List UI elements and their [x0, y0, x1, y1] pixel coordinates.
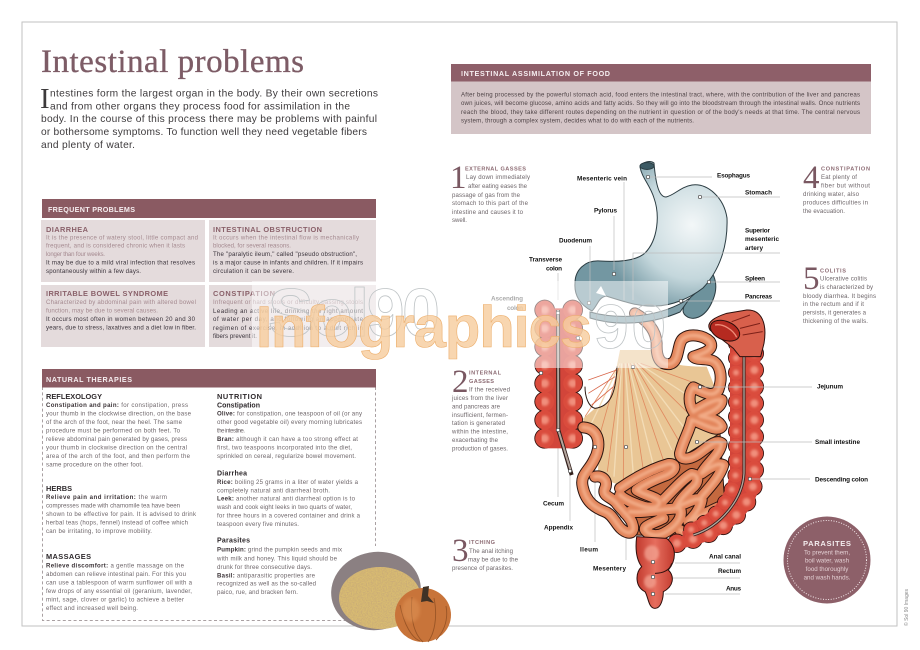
text: massages: MASSAGES	[46, 552, 91, 561]
callout 4: constipation: Eat plenty of	[821, 174, 857, 181]
heading: natural therapies	[42, 369, 376, 388]
text: reflexology: of the arch of the foot, near the heel. The same	[46, 419, 183, 426]
callout 5: colitis: 5	[803, 261, 820, 297]
callout 4: constipation	[803, 160, 870, 215]
text: herbs: HERBS	[46, 484, 72, 493]
text: massages	[46, 552, 193, 612]
cell: diarrhea: longer than four weeks.	[46, 251, 105, 258]
callout: parasites badge: and wash hands.	[804, 574, 851, 582]
cell: constipation: Infrequent or hard stools or difficulty passing stools.	[213, 299, 365, 306]
illustration: stomach, spleen and pancreas	[575, 162, 727, 323]
cell: intestinal obstruction: INTESTINAL OBSTRUCTION	[213, 225, 322, 234]
text: herbs: compresses made with chamomile tea have been	[46, 502, 180, 510]
cell: intestinal obstruction: It occurs when the intestinal flow is mechanically	[213, 234, 360, 242]
anatomy labels: Anus	[726, 586, 741, 592]
callout 2: internal gasses: If the received	[469, 386, 510, 394]
text: herbs: shown to be effective for pain. It is advised to drink	[46, 511, 197, 518]
callout 5: colitis: COLITIS	[820, 268, 846, 274]
callout 1: external gasses: 1	[450, 160, 466, 196]
cell: intestinal obstruction	[209, 220, 376, 282]
anatomy labels: Ileum	[580, 546, 598, 554]
leader lines: lower anatomy	[558, 430, 740, 594]
cell: constipation: of water per day, and following an appropriate	[213, 316, 364, 323]
heading: natural therapies: NATURAL THERAPIES	[46, 375, 132, 384]
text: reflexology: same procedure on the other foot.	[46, 462, 143, 468]
anatomy labels: Small intestine	[815, 439, 860, 446]
anatomy labels: artery	[745, 245, 763, 252]
text: reflexology	[46, 392, 192, 468]
callout 4: constipation: drinking water, also	[803, 191, 860, 198]
ascending colon	[545, 308, 573, 448]
anatomy labels: Pylorus	[594, 208, 617, 214]
text: nutrition: other good vegetable oil) every morning lubricates	[217, 419, 362, 426]
cell: constipation: regimen of exercise, in addition to a diet rich in	[213, 325, 363, 332]
anatomy labels: Anal canal	[709, 554, 741, 560]
anatomy labels: colon	[507, 305, 523, 312]
cell: diarrhea: frequent, and is considered chronic when it lasts	[46, 242, 185, 250]
cell: diarrhea	[41, 220, 205, 282]
cell: irritable bowel syndrome: It occurs most often in women between 20 and 30	[46, 316, 196, 323]
watermark band	[252, 281, 668, 368]
panel: frequent problems	[41, 199, 376, 347]
callout 2: internal gasses: juices from the liver	[451, 395, 508, 402]
watermark: Infographics	[256, 295, 592, 360]
text: reflexology: area of the arch of the foot, and then perform the	[46, 453, 191, 460]
cell: constipation: Leading an active life, drinking the right amount	[213, 308, 363, 315]
callout 4: constipation: CONSTIPATION	[821, 166, 870, 172]
callout 5: colitis: Ulcerative colitis	[820, 276, 867, 282]
callout 1: external gasses: Lay down immediately	[466, 174, 531, 181]
cell: irritable bowel syndrome: Characterized by abdominal pain with altered bowel	[46, 299, 196, 306]
callout 5: colitis	[803, 261, 876, 325]
intro text block: body. In the course of this process there may be problems with painful	[41, 114, 377, 125]
callout 5: colitis: in the rectum and if it	[803, 301, 864, 308]
callout 2: internal gasses: within the intestine,	[451, 428, 508, 436]
text: nutrition: teaspoon every five minutes.	[217, 521, 299, 528]
text: nutrition	[216, 392, 363, 596]
text: reflexology: Constipation and pain: for constipation, press	[46, 402, 188, 409]
callout: parasites badge: boil water, wash	[805, 558, 850, 564]
cell: diarrhea: It is the presence of watery stool, little compact and	[46, 234, 198, 242]
callout 2: internal gasses: and pancreas are	[452, 404, 501, 410]
leader lines: upper anatomy	[558, 177, 812, 479]
callout 1: external gasses: EXTERNAL GASSES	[465, 166, 526, 172]
heading: frequent problems: FREQUENT PROBLEMS	[48, 205, 135, 214]
text: reflexology: your thumb in clockwise direction on the central	[46, 444, 187, 452]
pylorus opening	[596, 286, 606, 296]
callout 4: constipation: the evacuation.	[803, 208, 845, 215]
panel: natural therapies	[42, 369, 376, 620]
appendix and colon band	[558, 310, 572, 475]
callout 2: internal gasses: INTERNAL	[469, 370, 502, 376]
callout 2: internal gasses: 2	[452, 364, 468, 400]
descending colon	[677, 320, 754, 543]
cell: intestinal obstruction: blocked, for several reasons.	[213, 242, 291, 250]
callout 2: internal gasses	[451, 364, 510, 452]
anatomy labels	[491, 172, 868, 592]
text: nutrition: Leek: another natural anti diarrheal option is to	[217, 496, 356, 502]
cell: intestinal obstruction: is a major cause in infants and children. If it impairs	[213, 260, 363, 266]
illustration: bowl of grain and pumpkin	[325, 545, 451, 642]
callout: parasites badge: PARASITES	[803, 539, 851, 548]
cell: irritable bowel syndrome: function, may be due to several causes.	[46, 308, 158, 314]
text: assimilation body: reach the blood, they take different routes depending on the nutrient in question or of the body's needs at that time. The central nervous	[461, 109, 860, 116]
text: nutrition: Rice: boiling 25 grams in a liter of water yields a	[217, 479, 359, 486]
callout 3: itching: may be due to the	[468, 556, 519, 564]
callout 5: colitis: thickening of the walls.	[803, 318, 868, 325]
heading: assimilation: INTESTINAL ASSIMILATION OF FOOD	[461, 69, 610, 78]
callout 3: itching	[452, 533, 519, 572]
rectum and anus	[636, 537, 674, 608]
callout 3: itching: The anal itching	[469, 548, 513, 555]
text: herbs: herbal teas (hops, fennel) instead of coffee which	[46, 520, 188, 526]
anatomy labels: Superior	[745, 228, 770, 234]
anatomy labels: Appendix	[544, 524, 573, 532]
anatomy labels: mesenteric	[745, 236, 779, 243]
anatomy labels: Esophagus	[717, 172, 750, 180]
text: massages: mint, sage, clover or garlic) to achieve a better	[46, 596, 184, 604]
pancreas	[590, 298, 690, 323]
text: reflexology: procedure must be performed on both feet. To	[46, 428, 181, 434]
intro text block: or bothersome symptoms. To function well they need vegetable fibers	[41, 127, 367, 138]
text: nutrition: Olive: for constipation, one teaspoon of oil (or any	[217, 410, 363, 418]
cell: diarrhea: It may be due to a mild viral infection that resolves	[46, 260, 195, 266]
intro text block: ntestines form the largest organ in the body. By their own secretions	[50, 88, 378, 100]
text: nutrition: NUTRITION	[217, 392, 262, 401]
callout 2: internal gasses: exacerbating the	[452, 437, 499, 444]
callout 2: internal gasses: GASSES	[469, 379, 494, 385]
anatomy labels: colon	[546, 266, 562, 272]
callout 1: external gasses: intestine and causes it to	[452, 209, 524, 216]
callout 5: colitis: persists, it generates a	[803, 310, 867, 316]
text: herbs	[46, 484, 197, 535]
callout 3: itching: 3	[452, 533, 468, 569]
anatomy labels: Mesenteric vein	[577, 176, 627, 182]
spleen	[683, 262, 716, 318]
anatomy labels: Stomach	[745, 190, 772, 196]
text: assimilation body: own juices, will become glucose, amino acids and fatty acids. So they will go into the bloodstream through the intestinal walls. Once nutrients	[461, 100, 860, 107]
anatomy labels: Ascending	[491, 296, 523, 302]
text: assimilation body	[461, 92, 860, 124]
text: nutrition: paico, rue, and bracken fern.	[217, 589, 298, 596]
anatomy labels: Mesentery	[593, 566, 626, 572]
callout 2: internal gasses: tation is generated	[452, 420, 505, 427]
cell: constipation: CONSTIPATION	[213, 289, 275, 298]
anatomy labels: Descending colon	[815, 476, 868, 484]
intro text block: I	[40, 83, 50, 115]
text: nutrition: first, two teaspoons incorporated into the diet,	[217, 444, 352, 452]
esophagus opening	[640, 162, 654, 170]
heading: assimilation	[451, 64, 871, 82]
stomach	[575, 162, 727, 311]
text: nutrition: for three hours in a covered container and drink a	[217, 512, 361, 520]
text: nutrition: Bran: although it can have a too strong effect at	[217, 436, 358, 443]
watermark: 90	[594, 293, 666, 362]
text: nutrition: completely natural anti diarrheal broth.	[217, 488, 330, 494]
callout 1: external gasses: after eating eases the	[468, 183, 528, 190]
callout 3: itching: ITCHING	[469, 540, 495, 546]
cell: constipation	[209, 285, 376, 347]
callout 1: external gasses: passage of gas from the	[452, 192, 521, 199]
label dots	[539, 175, 752, 596]
intro text block: and plenty of water.	[41, 140, 135, 151]
text: assimilation body: After being processed by the powerful stomach acid, food enters the intestinal tract, where, with the contribution of the liver and pancreas	[461, 92, 860, 98]
text: herbs: can be irritating, to improve mobility.	[46, 528, 152, 535]
mesentery	[583, 350, 720, 487]
callout 4: constipation: fiber but without	[821, 182, 870, 190]
text: massages: few drops of any essential oil (geranium, lavender,	[46, 588, 192, 595]
anatomy labels: Spleen	[745, 276, 765, 282]
cell: constipation: fibers prevent it.	[213, 333, 257, 340]
text: nutrition: drunk for three consecutive days.	[217, 564, 312, 571]
callout 1: external gasses	[450, 160, 531, 224]
text: nutrition: the intestine.	[217, 428, 245, 434]
callout 5: colitis: is characterized by	[820, 284, 874, 291]
text: nutrition: recognized as well as the so-called	[217, 580, 316, 588]
cell: diarrhea: spontaneously within a few days.	[46, 268, 141, 275]
anatomy labels: Jejunum	[817, 384, 843, 390]
callout 5: colitis: bloody diarrhea. It begins	[803, 293, 876, 300]
anatomy labels: Transverse	[529, 256, 562, 264]
callout 4: constipation: produces difficulties in	[803, 200, 868, 206]
cell: irritable bowel syndrome: years, due to stress, laxatives and a diet low in fiber.	[46, 324, 196, 332]
text: nutrition: sprinkled on cereal, regularize bowel movement.	[217, 453, 356, 460]
heading: frequent problems	[42, 199, 376, 218]
callout: parasites badge: To prevent them,	[804, 550, 850, 556]
anatomy labels: Cecum	[543, 500, 564, 508]
colon cut end	[707, 310, 765, 357]
callout 1: external gasses: stomach to this part of the	[452, 200, 529, 207]
anatomy labels: Duodenum	[559, 238, 592, 244]
intro text block: and from other organs they process food for assimilation in the	[50, 102, 350, 112]
text: nutrition: Pumpkin: grind the pumpkin seeds and mix	[217, 546, 342, 554]
text: massages: abdomen can relieve intestinal pain. For this you	[46, 571, 186, 578]
cell: irritable bowel syndrome: IRRITABLE BOWEL SYNDROME	[46, 289, 168, 298]
text: massages: effect and increased well being.	[46, 605, 138, 612]
callout 1: external gasses: swell.	[452, 217, 467, 224]
text: nutrition: Constipation	[217, 402, 260, 410]
anatomy labels: Pancreas	[745, 294, 772, 300]
callout 2: internal gasses: insufficient, fermen-	[452, 412, 508, 419]
text: herbs: Relieve pain and irritation: the warm	[46, 494, 167, 501]
callout: parasites badge	[784, 516, 870, 604]
text: nutrition: Parasites	[217, 538, 250, 544]
text: reflexology: relieve abdominal pain generated by gases, press	[46, 436, 187, 443]
cell: intestinal obstruction: The "paralytic ileum," called "pseudo obstruction",	[213, 251, 357, 258]
anatomy labels: Rectum	[718, 568, 741, 575]
cell: irritable bowel syndrome	[41, 285, 205, 347]
text: nutrition: with milk and honey. This liquid should be	[216, 556, 338, 562]
text: reflexology: your thumb in the clockwise direction, on the base	[46, 410, 192, 418]
intro text block	[40, 83, 378, 151]
text: massages: Relieve discomfort: a gentle massage on the	[46, 562, 185, 570]
dashed panel border	[42, 387, 376, 620]
watermark: Sol90	[268, 275, 440, 351]
small intestine	[582, 313, 725, 537]
illustration: large and small intestine	[545, 308, 765, 608]
credit: © Sol 90 Images	[903, 588, 910, 626]
text: nutrition: wash and cook eight leeks in two quarts of water,	[216, 504, 352, 511]
panel: intestinal assimilation of food	[451, 64, 871, 134]
title: Intestinal problems	[41, 44, 304, 80]
cell: intestinal obstruction: circulation it can be severe.	[213, 268, 294, 275]
text: nutrition: Diarrhea	[217, 470, 247, 478]
callout 2: internal gasses: production of gases.	[452, 446, 508, 452]
callout 4: constipation: 4	[803, 160, 820, 196]
watermark	[256, 275, 666, 362]
text: assimilation body: system, through a complex system, decides what to do with each of the nutrients.	[461, 118, 694, 124]
text: nutrition: Basil: antiparasitic properties are	[217, 572, 316, 580]
cell: diarrhea: DIARRHEA	[46, 225, 89, 234]
text: massages: can use a tablespoon of warm sunflower oil with a	[46, 580, 193, 586]
callout 3: itching: presence of parasites.	[452, 565, 513, 572]
text: reflexology: REFLEXOLOGY	[46, 392, 102, 401]
callout: parasites badge: food thoroughly	[806, 566, 849, 573]
